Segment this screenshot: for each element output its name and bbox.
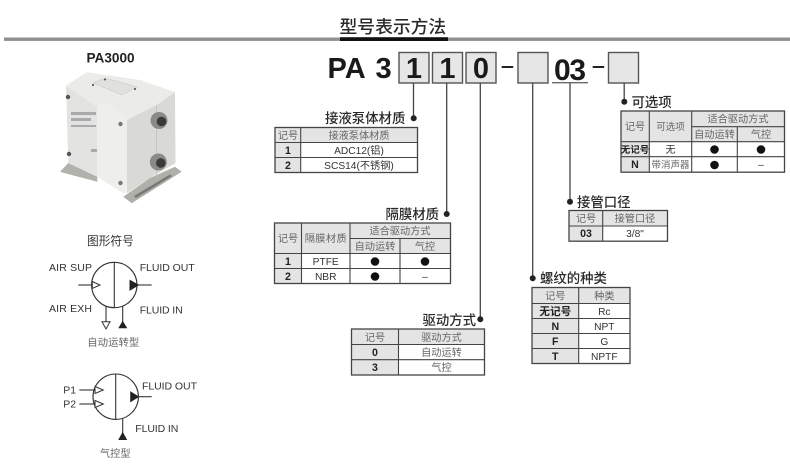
panel: option — [621, 95, 784, 172]
panel: diaphragm material: NBR — [315, 272, 336, 283]
panel: thread type: 记号 — [545, 290, 565, 302]
symbol: automatic operation type: AIR SUP — [49, 262, 92, 274]
model code: 0 — [473, 53, 489, 85]
symbol: air pilot type: FLUID OUT — [142, 380, 198, 392]
panel: thread type: Rc — [598, 307, 611, 318]
panel: wetted material: 接液泵体材质 — [328, 129, 390, 142]
leader: wetted material — [411, 83, 417, 121]
panel: thread type: NPTF — [591, 352, 618, 363]
panel: option: 无 — [665, 145, 676, 156]
panel: option: 气控 — [751, 128, 771, 141]
panel: option: 适合驱动方式 — [707, 112, 769, 126]
panel: wetted material — [275, 111, 418, 172]
panel: diaphragm material: – — [422, 272, 428, 283]
panel: thread type: 种类 — [594, 290, 614, 302]
symbol: air pilot type: 气控型 — [100, 447, 131, 460]
symbol: air pilot type — [63, 374, 198, 460]
panel: thread type: T — [552, 351, 559, 363]
leader: port size — [567, 83, 573, 205]
panel: port size — [569, 194, 668, 241]
symbol: automatic operation type: FLUID IN — [140, 304, 183, 316]
panel: wetted material: 接液泵体材质 — [325, 111, 405, 126]
panel: wetted material: ADC12(铝) — [334, 144, 384, 157]
panel: drive method — [352, 312, 484, 375]
model code — [328, 52, 638, 87]
panel: drive method: 气控 — [431, 361, 452, 374]
panel: port size: 记号 — [576, 213, 596, 225]
panel: option: – — [758, 160, 764, 171]
model code: 1 — [406, 53, 422, 85]
panel: diaphragm material — [274, 206, 450, 284]
panel: option: 无记号 — [621, 145, 649, 156]
model code: PA — [328, 53, 366, 85]
panel: wetted material: 2 — [285, 160, 291, 172]
panel: option: 可选项 — [632, 95, 672, 110]
panel: diaphragm material: 气控 — [415, 240, 435, 253]
heading: symbol: 图形符号 — [87, 234, 134, 248]
panel: thread type: 无记号 — [539, 306, 571, 318]
panel: diaphragm material: 1 — [285, 256, 291, 268]
panel: thread type: G — [600, 337, 608, 348]
panel: drive method: 记号 — [365, 332, 385, 344]
panel: port size: 03 — [580, 228, 592, 240]
panel: diaphragm material: 记号 — [278, 233, 298, 245]
product name: PA3000 — [86, 50, 135, 66]
panel: option: N — [631, 159, 639, 171]
panel: drive method: 自动运转 — [421, 346, 462, 359]
panel: option: 可选项 — [656, 121, 685, 133]
panel: drive method: 驱动方式 — [421, 331, 462, 344]
panel: diaphragm material: 隔膜材质 — [386, 206, 439, 222]
model code: 03 — [554, 54, 586, 87]
panel: thread type: F — [552, 336, 559, 348]
panel: port size: 接管口径 — [577, 194, 631, 210]
model code: 1 — [439, 53, 456, 85]
panel: drive method: 0 — [372, 347, 378, 359]
title: model designation: 型号表示方法 — [340, 17, 446, 37]
panel: option: 自动运转 — [694, 128, 735, 141]
symbol: air pilot type: P2 — [63, 398, 76, 410]
panel: wetted material: 记号 — [278, 130, 298, 142]
panel: thread type: NPT — [594, 322, 614, 333]
panel: port size: 接管口径 — [615, 212, 655, 225]
symbol: automatic operation type: AIR EXH — [49, 303, 92, 315]
panel: port size: 3/8" — [626, 229, 644, 240]
panel: option: 带消声器 — [651, 159, 690, 171]
panel: thread type: N — [551, 321, 559, 333]
panel: diaphragm material: 2 — [285, 271, 291, 283]
symbol: air pilot type: FLUID IN — [135, 423, 178, 435]
panel: option: 记号 — [625, 121, 645, 133]
leader: option — [621, 83, 627, 105]
leader: thread type — [530, 83, 536, 281]
symbol: automatic operation type: 自动运转型 — [87, 336, 139, 349]
symbol: automatic operation type: FLUID OUT — [140, 262, 195, 274]
panel: wetted material: 1 — [285, 145, 291, 157]
panel: drive method: 3 — [372, 362, 378, 374]
panel: diaphragm material: 自动运转 — [355, 240, 395, 253]
leader: diaphragm material — [444, 83, 450, 217]
model code: 3 — [376, 53, 392, 85]
title: model designation — [4, 17, 790, 41]
symbol: automatic operation type — [49, 262, 195, 349]
panel: diaphragm material: 适合驱动方式 — [369, 224, 431, 238]
panel: diaphragm material: 隔膜材质 — [305, 232, 347, 245]
leader: drive method — [477, 83, 483, 322]
panel: wetted material: SCS14(不锈钢) — [324, 159, 394, 172]
symbol: air pilot type: P1 — [63, 385, 76, 397]
panel: thread type: 螺纹的种类 — [540, 271, 607, 286]
panel: diaphragm material: PTFE — [313, 257, 339, 268]
panel: thread type — [532, 271, 630, 364]
panel: drive method: 驱动方式 — [422, 312, 477, 328]
product image: pump — [60, 72, 182, 203]
